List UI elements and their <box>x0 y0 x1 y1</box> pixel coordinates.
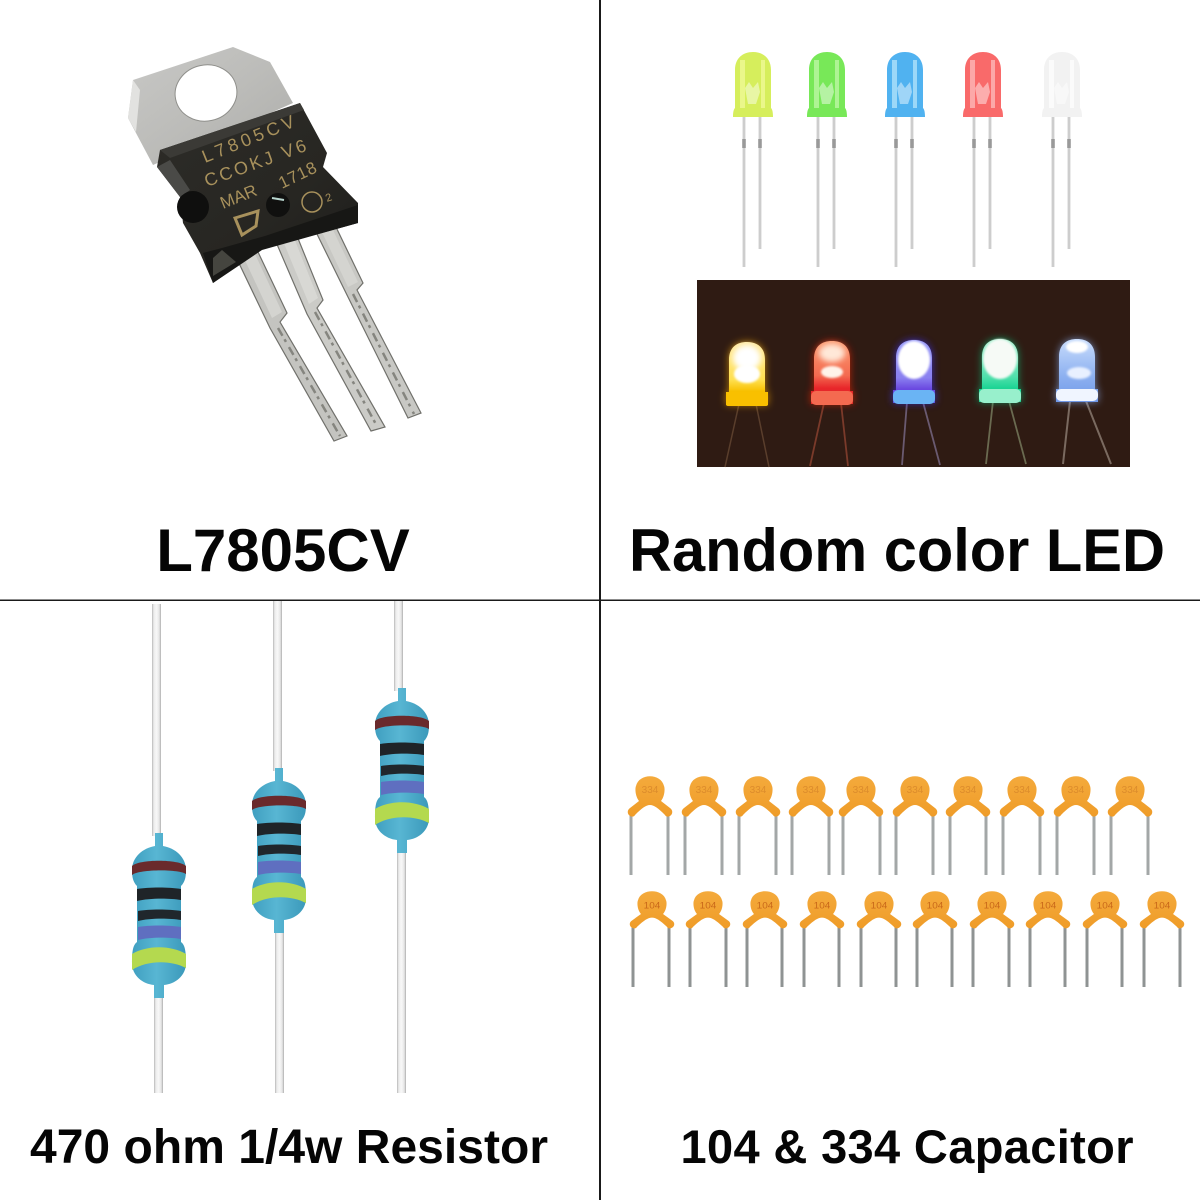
capacitor 104 #10: 104 <box>1154 901 1171 911</box>
capacitor 104 #10 <box>1140 891 1184 928</box>
icon: L7805CV black body <box>157 103 358 283</box>
capacitor 334 #8 <box>1000 776 1044 817</box>
body marking: L7805CV: L7805CV <box>199 111 297 167</box>
LED: white <box>1042 52 1082 267</box>
capacitor row: 334 <box>628 776 1152 875</box>
LED: blue <box>885 52 925 267</box>
capacitor 334 #4 <box>789 776 833 817</box>
capacitor 334 #9: 334 <box>1068 785 1085 796</box>
capacitor 104 #1 <box>630 891 674 928</box>
lit LED: green <box>979 339 1026 464</box>
icon: resistor 1 <box>132 604 186 1093</box>
body marking: CCOKJ V6: CCOKJ V6 <box>202 135 309 191</box>
body marking: 2: 2 <box>324 191 334 205</box>
icon: resistor 3 <box>375 600 429 1093</box>
capacitor 104 #9 <box>1083 891 1127 928</box>
lit LED: yellow <box>725 342 769 467</box>
icon: resistor 2 <box>252 600 306 1093</box>
capacitor 334 #1: 334 <box>642 785 659 796</box>
capacitor 334 #1 <box>628 776 672 817</box>
panel: 470 ohm resistor <box>30 600 548 1174</box>
capacitor 104 #5 <box>857 891 901 928</box>
body marking: MAR: MAR <box>217 181 260 213</box>
capacitor 334 #3: 334 <box>750 785 767 796</box>
heading: L7805CV: L7805CV <box>156 517 410 584</box>
capacitor 334 #8: 334 <box>1014 785 1031 796</box>
lit LED: red <box>810 341 853 466</box>
LED: green <box>807 52 847 267</box>
body marking: 1718: 1718 <box>275 158 320 193</box>
heading: Random color LED: Random color LED <box>629 517 1165 584</box>
capacitor 104 #3: 104 <box>757 901 774 911</box>
capacitor 104 #6 <box>913 891 957 928</box>
capacitor 104 #8 <box>1026 891 1070 928</box>
capacitor 104 #8: 104 <box>1040 901 1057 911</box>
capacitor 334 #10 <box>1108 776 1152 817</box>
LED: red <box>963 52 1003 267</box>
capacitor 334 #2: 334 <box>696 785 713 796</box>
capacitor 334 #6: 334 <box>907 785 924 796</box>
icon: L7805CV leads <box>236 225 421 441</box>
LED: yellow <box>733 52 773 267</box>
capacitor 104 #4 <box>800 891 844 928</box>
capacitor 334 #10: 334 <box>1122 785 1139 796</box>
capacitor 104 #5: 104 <box>871 901 888 911</box>
panel: L7805CV regulator <box>128 47 421 584</box>
capacitor 104 #2 <box>686 891 730 928</box>
capacitor 334 #3 <box>736 776 780 817</box>
capacitor 104 #9: 104 <box>1097 901 1114 911</box>
capacitor 334 #5 <box>839 776 883 817</box>
capacitor 334 #2 <box>682 776 726 817</box>
capacitor 334 #7: 334 <box>960 785 977 796</box>
capacitor 334 #4: 334 <box>803 785 820 796</box>
photo panel: lit LEDs on dark background <box>697 280 1130 467</box>
capacitor 104 #1: 104 <box>644 901 661 911</box>
capacitor 334 #5: 334 <box>853 785 870 796</box>
heading: 104 & 334 Capacitor: 104 & 334 Capacitor <box>680 1120 1134 1173</box>
capacitor 104 #7 <box>970 891 1014 928</box>
icon: unlit LED row <box>733 52 1082 267</box>
capacitor 334 #7 <box>946 776 990 817</box>
lit LED: white-blue <box>1056 339 1111 464</box>
capacitor 334 #9 <box>1054 776 1098 817</box>
capacitor 104 #3 <box>743 891 787 928</box>
heading: 470 ohm 1/4w Resistor: 470 ohm 1/4w Resistor <box>30 1121 548 1174</box>
capacitor 104 #2: 104 <box>700 901 717 911</box>
capacitor 334 #6 <box>893 776 937 817</box>
icon: L7805CV metal tab with mounting hole <box>128 47 293 165</box>
capacitor 104 #7: 104 <box>984 901 1001 911</box>
capacitor row: 104 <box>630 891 1184 987</box>
panel: 104 and 334 capacitors <box>628 776 1184 1173</box>
panel: random color LED <box>629 52 1165 584</box>
lit LED: blue <box>893 340 940 465</box>
capacitor 104 #4: 104 <box>814 901 831 911</box>
capacitor 104 #6: 104 <box>927 901 944 911</box>
